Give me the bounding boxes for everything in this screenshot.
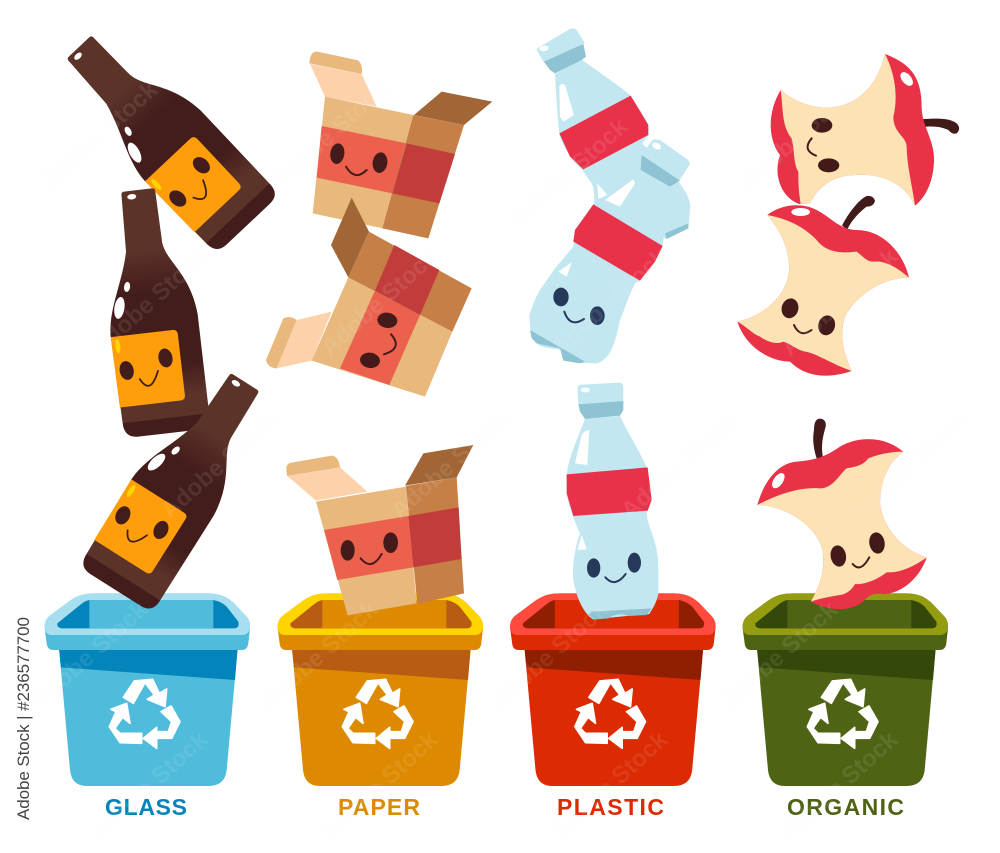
- watermark: faint repeated stock text: Adobe Stock: [266, 76, 394, 194]
- watermark: faint repeated stock text: Adobe Stock: [256, 596, 384, 714]
- label: ORGANIC: ORGANIC: [787, 794, 904, 820]
- icon: plastic bottle bottom: [567, 383, 658, 619]
- watermark: faint repeated stock text: Adobe Stock: [776, 726, 904, 844]
- bin: organic: [743, 593, 948, 786]
- watermark: faint repeated stock text: Adobe Stock: [316, 726, 444, 844]
- watermark: faint repeated stock text: Adobe Stock: [486, 596, 614, 714]
- icon: plastic bottle top: [537, 28, 690, 239]
- icon: cardboard box middle: [266, 198, 472, 397]
- bin: paper: [278, 593, 483, 786]
- watermark: faint repeated stock text: Adobe Stock: [316, 243, 444, 361]
- icon: apple core top: [771, 54, 959, 206]
- watermark: faint repeated stock text: Adobe Stock: [156, 406, 284, 524]
- watermark: faint repeated stock text: Adobe Stock: [86, 726, 214, 844]
- label: GLASS: GLASS: [105, 794, 187, 820]
- bin: glass: [45, 593, 250, 786]
- bin: plastic: [510, 593, 716, 786]
- watermark: faint repeated stock text: Adobe Stock: [386, 406, 514, 524]
- icon: apple core bottom: [757, 419, 927, 609]
- watermark: faint repeated stock text: Adobe Stock: [776, 243, 904, 361]
- panel: plastic column: [510, 28, 716, 820]
- watermark: faint repeated stock text: Adobe Stock: [26, 596, 154, 714]
- icon: plastic bottle middle: [529, 139, 690, 363]
- watermark: faint repeated stock text: Adobe Stock: [846, 406, 974, 524]
- watermark: faint repeated stock text: Adobe Stock: [506, 113, 634, 231]
- watermark: faint repeated stock text: Adobe Stock: [616, 406, 744, 524]
- panel: organic column: [737, 54, 959, 820]
- panel: glass column: [45, 16, 283, 820]
- icon: cardboard box bottom: [286, 445, 473, 615]
- label: PLASTIC: PLASTIC: [557, 794, 664, 820]
- icon: apple core middle: [737, 196, 909, 376]
- watermark: faint repeated stock text: Adobe Stock: [736, 76, 864, 194]
- watermark: faint repeated stock text: Adobe Stock: [86, 243, 214, 361]
- icon: glass bottle top: [47, 16, 280, 255]
- icon: glass bottle middle: [94, 185, 211, 438]
- watermark: faint repeated stock text: Adobe Stock: [546, 243, 674, 361]
- icon: glass bottle bottom: [77, 358, 283, 613]
- watermark: faint repeated stock text: Adobe Stock: [716, 596, 844, 714]
- label: PAPER: PAPER: [338, 794, 420, 820]
- panel: paper column: [266, 52, 492, 820]
- watermark: faint repeated stock text: Adobe Stock: [546, 726, 674, 844]
- icon: cardboard box top: [309, 52, 492, 238]
- caption: stock image id: Adobe Stock | #236577700: [14, 617, 33, 820]
- watermark: faint repeated stock text: Adobe Stock: [36, 76, 164, 194]
